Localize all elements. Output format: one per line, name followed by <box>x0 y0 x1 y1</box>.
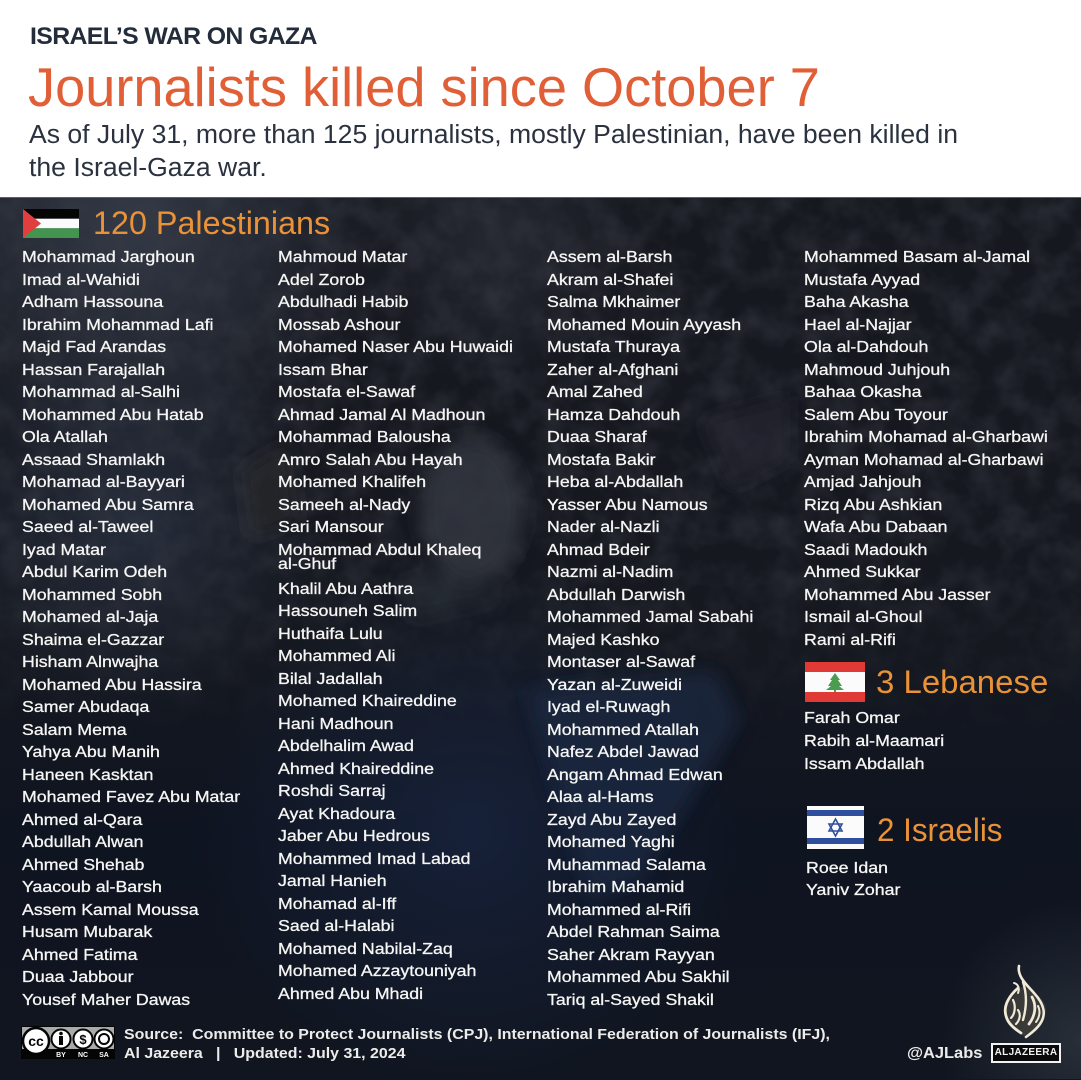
icon: Creative Commons badge: NC <box>78 1052 88 1059</box>
names: column 4: Rizq Abu Ashkian <box>804 496 942 514</box>
icon: Creative Commons badge <box>21 1026 115 1059</box>
names: column 4: Saadi Madoukh <box>804 542 927 558</box>
subtitle <box>29 121 958 182</box>
names: column 1: Haneen Kasktan <box>22 766 153 784</box>
names: column 2: Ahmed Abu Mhadi <box>278 986 423 1002</box>
names: column 3: Abdel Rahman Saima <box>547 924 720 941</box>
names: column 2: Mostafa el-Sawaf <box>278 384 415 401</box>
header: kicker: ISRAEL’S WAR ON GAZA <box>30 23 317 50</box>
names: column 4: Mahmoud Juhjouh <box>804 362 950 378</box>
names: column 2: Jaber Abu Hedrous <box>278 828 430 845</box>
names: column 2: Issam Bhar <box>278 362 368 378</box>
names: column 4: Rami al-Rifi <box>804 632 896 648</box>
names: column 3: Mohammed Jamal Sabahi <box>547 609 753 626</box>
names: column 1: Mohamed Abu Hassira <box>22 676 202 694</box>
names: column 1: Mohamed al-Jaja <box>22 609 158 626</box>
names: column 2: Jamal Hanieh <box>278 873 387 890</box>
names: column 3: Zayd Abu Zayed <box>547 812 676 828</box>
names: column 2: Mahmoud Matar <box>278 249 407 266</box>
names: column 4: Hael al-Najjar <box>804 316 912 334</box>
icon: Creative Commons badge: cc <box>28 1033 44 1049</box>
names: column 2: Hassouneh Salim <box>278 603 417 620</box>
names: column 1: Mohamed Favez Abu Matar <box>22 789 240 806</box>
names: column 3: Ibrahim Mahamid <box>547 879 684 896</box>
names: column 3: Mostafa Bakir <box>547 452 656 468</box>
names: column 1: Yousef Maher Dawas <box>22 992 190 1008</box>
icon: Palestinian flag <box>23 209 79 238</box>
names: column 3: Mohammed Abu Sakhil <box>547 969 730 986</box>
names: column 4: Ayman Mohamad al-Gharbawi <box>804 452 1044 468</box>
icon: Creative Commons badge: $ <box>79 1032 87 1047</box>
icon: Creative Commons badge: BY <box>56 1052 66 1059</box>
handle: @AJLabs: @AJLabs <box>907 1045 982 1062</box>
names: column 3: Nafez Abdel Jawad <box>547 744 699 761</box>
names: column 3: Iyad el-Ruwagh <box>547 699 670 716</box>
source and update note <box>124 1027 830 1062</box>
names: column 2: Abdulhadi Habib <box>278 294 408 311</box>
names: column 1: Saeed al-Taweel <box>22 519 153 536</box>
names: column 3: Angam Ahmad Edwan <box>547 766 723 784</box>
names: column 1: Ibrahim Mohammad Lafi <box>22 316 213 334</box>
names: column 3: Akram al-Shafei <box>547 272 673 288</box>
names: column 1: Salam Mema <box>22 722 127 738</box>
names: column 2: Mohamad al-Iff <box>278 896 396 912</box>
names: column 4: Bahaa Okasha <box>804 384 922 401</box>
names: column 2: Bilal Jadallah <box>278 670 383 688</box>
names: column 4: Amjad Jahjouh <box>804 474 921 491</box>
names: column 4: Mohammed Basam al-Jamal <box>804 249 1030 266</box>
names: column 1: Majd Fad Arandas <box>22 339 166 356</box>
names: column 2: Roshdi Sarraj <box>278 783 386 800</box>
names: column 3: Mohamed Mouin Ayyash <box>547 316 741 334</box>
names: column 1: Assem Kamal Moussa <box>22 902 199 918</box>
names: column 1: Mohammed Sobh <box>22 586 162 604</box>
names: column 3: Ahmad Bdeir <box>547 542 650 558</box>
names: column 4: Ibrahim Mohamad al-Gharbawi <box>804 429 1048 446</box>
names: column 2 <box>278 249 513 1002</box>
names: column 1: Hisham Alnwajha <box>22 654 158 671</box>
names: column 2: Amro Salah Abu Hayah <box>278 452 463 468</box>
names: column 1: Yaacoub al-Barsh <box>22 879 162 896</box>
names: column 4: Baha Akasha <box>804 294 909 311</box>
names: Lebanese <box>804 710 944 773</box>
names: column 2: Ayat Khadoura <box>278 806 395 822</box>
names: column 1: Yahya Abu Manih <box>22 744 160 761</box>
names: column 2: Sari Mansour <box>278 519 384 536</box>
names: column 3: Mohamed Yaghi <box>547 834 675 851</box>
heading: 120 Palestinians: 120 Palestinians <box>93 205 330 241</box>
names: column 2: Mohamed Nabilal-Zaq <box>278 940 453 958</box>
names: Lebanese: Farah Omar <box>804 710 900 727</box>
names: column 3: Nader al-Nazli <box>547 519 660 536</box>
names: column 4: Salem Abu Toyour <box>804 406 948 424</box>
names: column 1: Mohammed Abu Hatab <box>22 406 204 424</box>
icon: Al Jazeera calligraphic logo <box>1004 964 1046 1038</box>
names: column 1: Imad al-Wahidi <box>22 272 140 288</box>
names: column 3: Amal Zahed <box>547 384 643 401</box>
names: column 2: Sameeh al-Nady <box>278 496 410 514</box>
icon: Israeli flag <box>807 806 864 849</box>
names: column 1: Abdullah Alwan <box>22 834 143 851</box>
names: column 2: Mohammed Ali <box>278 648 395 665</box>
names: column 2: Hani Madhoun <box>278 716 394 732</box>
names: column 1: Ahmed al-Qara <box>22 812 142 828</box>
names: column 3: Majed Kashko <box>547 632 660 648</box>
names: column 1: Assaad Shamlakh <box>22 452 165 468</box>
wordmark: Al Jazeera <box>991 1043 1061 1063</box>
names: column 1: Husam Mubarak <box>22 924 152 941</box>
names: column 2: Mohamed Khalifeh <box>278 474 426 491</box>
names: column 3: Heba al-Abdallah <box>547 474 683 491</box>
names: Lebanese: Rabih al-Maamari <box>804 733 944 750</box>
names: column 2: Mohammad Balousha <box>278 429 451 446</box>
names: column 1: Adham Hassouna <box>22 294 163 311</box>
names: column 1: Iyad Matar <box>22 542 106 558</box>
subtitle: As of July 31, more than 125 journalists, mostly Palestinian, have been killed in <box>29 121 958 149</box>
names: column 3: Yasser Abu Namous <box>547 496 708 514</box>
heading: 2 Israelis: 2 Israelis <box>877 812 1002 848</box>
source and update note: Al Jazeera | Updated: July 31, 2024 <box>124 1046 405 1062</box>
heading: 3 Lebanese: 3 Lebanese <box>876 664 1048 700</box>
names: column 1: Mohamed Abu Samra <box>22 496 194 514</box>
names: column 1: Abdul Karim Odeh <box>22 564 167 581</box>
names: column 4: Ismail al-Ghoul <box>804 609 922 626</box>
names: column 1: Samer Abudaqa <box>22 699 149 716</box>
names: column 1: Mohammad al-Salhi <box>22 384 180 401</box>
names: column 4: Ahmed Sukkar <box>804 564 920 581</box>
icon: Creative Commons badge: SA <box>99 1052 109 1059</box>
names: column 3: Mohammed Atallah <box>547 722 699 738</box>
names: column 2: Mohammed Imad Labad <box>278 850 471 868</box>
names: column 2: Saed al-Halabi <box>278 918 394 935</box>
names: column 3: Yazan al-Zuweidi <box>547 676 682 694</box>
names: column 4: Mohammed Abu Jasser <box>804 586 991 604</box>
names: Israelis: Roee Idan <box>806 860 888 877</box>
names: column 2: Mossab Ashour <box>278 316 400 334</box>
names: column 2: Mohamed Naser Abu Huwaidi <box>278 339 513 356</box>
subtitle: the Israel-Gaza war. <box>29 154 267 182</box>
names: column 3: Tariq al-Sayed Shakil <box>547 992 714 1008</box>
names: column 1: Duaa Jabbour <box>22 969 134 986</box>
names: column 1 <box>22 249 240 1008</box>
names: column 2: Mohamed Khaireddine <box>278 693 457 710</box>
names: column 3: Mohammed al-Rifi <box>547 902 691 918</box>
names: column 2: Ahmed Khaireddine <box>278 760 434 778</box>
names: column 2: Abdelhalim Awad <box>278 738 414 755</box>
names: column 3: Saher Akram Rayyan <box>547 946 715 964</box>
names: column 1: Shaima el-Gazzar <box>22 632 164 648</box>
names: column 3: Montaser al-Sawaf <box>547 654 695 671</box>
names: column 3: Abdullah Darwish <box>547 586 685 604</box>
names: column 3: Hamza Dahdouh <box>547 406 680 424</box>
names: column 1: Ahmed Fatima <box>22 946 137 964</box>
names: Lebanese: Issam Abdallah <box>804 756 924 773</box>
names: column 3: Muhammad Salama <box>547 856 706 874</box>
icon: Lebanese flag <box>805 662 865 702</box>
names: column 1: Ola Atallah <box>22 429 108 446</box>
names: column 4: Wafa Abu Dabaan <box>804 519 948 536</box>
wordmark: Al Jazeera: ALJAZEERA <box>995 1047 1057 1058</box>
title: Journalists killed since October 7 <box>28 56 820 118</box>
names: column 2: al-Ghuf <box>278 556 336 572</box>
source and update note: Source: Committee to Protect Journalists (CPJ), International Federation of Journalists (IFJ), <box>124 1027 830 1043</box>
names: column 4: Ola al-Dahdouh <box>804 339 928 356</box>
names: column 3: Salma Mkhaimer <box>547 294 680 311</box>
names: column 2: Mohammad Abdul Khaleq <box>278 542 481 558</box>
names: column 2: Khalil Abu Aathra <box>278 580 413 598</box>
names: column 3: Alaa al-Hams <box>547 789 654 806</box>
names: column 3: Nazmi al-Nadim <box>547 564 673 581</box>
names: Israelis <box>806 860 900 899</box>
names: column 4: Mustafa Ayyad <box>804 272 920 288</box>
names: column 4 <box>804 249 1048 1022</box>
names: column 1: Mohamad al-Bayyari <box>22 474 185 491</box>
names: column 1: Hassan Farajallah <box>22 362 165 378</box>
names: column 2: Adel Zorob <box>278 272 365 288</box>
names: Israelis: Yaniv Zohar <box>806 882 900 899</box>
names: column 3 <box>546 249 753 1009</box>
names: column 2: Mohamed Azzaytouniyah <box>278 963 476 980</box>
names: column 1: Mohammad Jarghoun <box>22 249 195 266</box>
names: column 3: Duaa Sharaf <box>547 429 647 446</box>
names: column 2: Ahmad Jamal Al Madhoun <box>278 406 485 424</box>
names: column 3: Mustafa Thuraya <box>547 339 680 356</box>
names: column 1: Ahmed Shehab <box>22 856 144 874</box>
names: column 3: Zaher al-Afghani <box>547 362 678 378</box>
names: column 3: Assem al-Barsh <box>547 249 672 266</box>
names: column 2: Huthaifa Lulu <box>278 626 383 642</box>
